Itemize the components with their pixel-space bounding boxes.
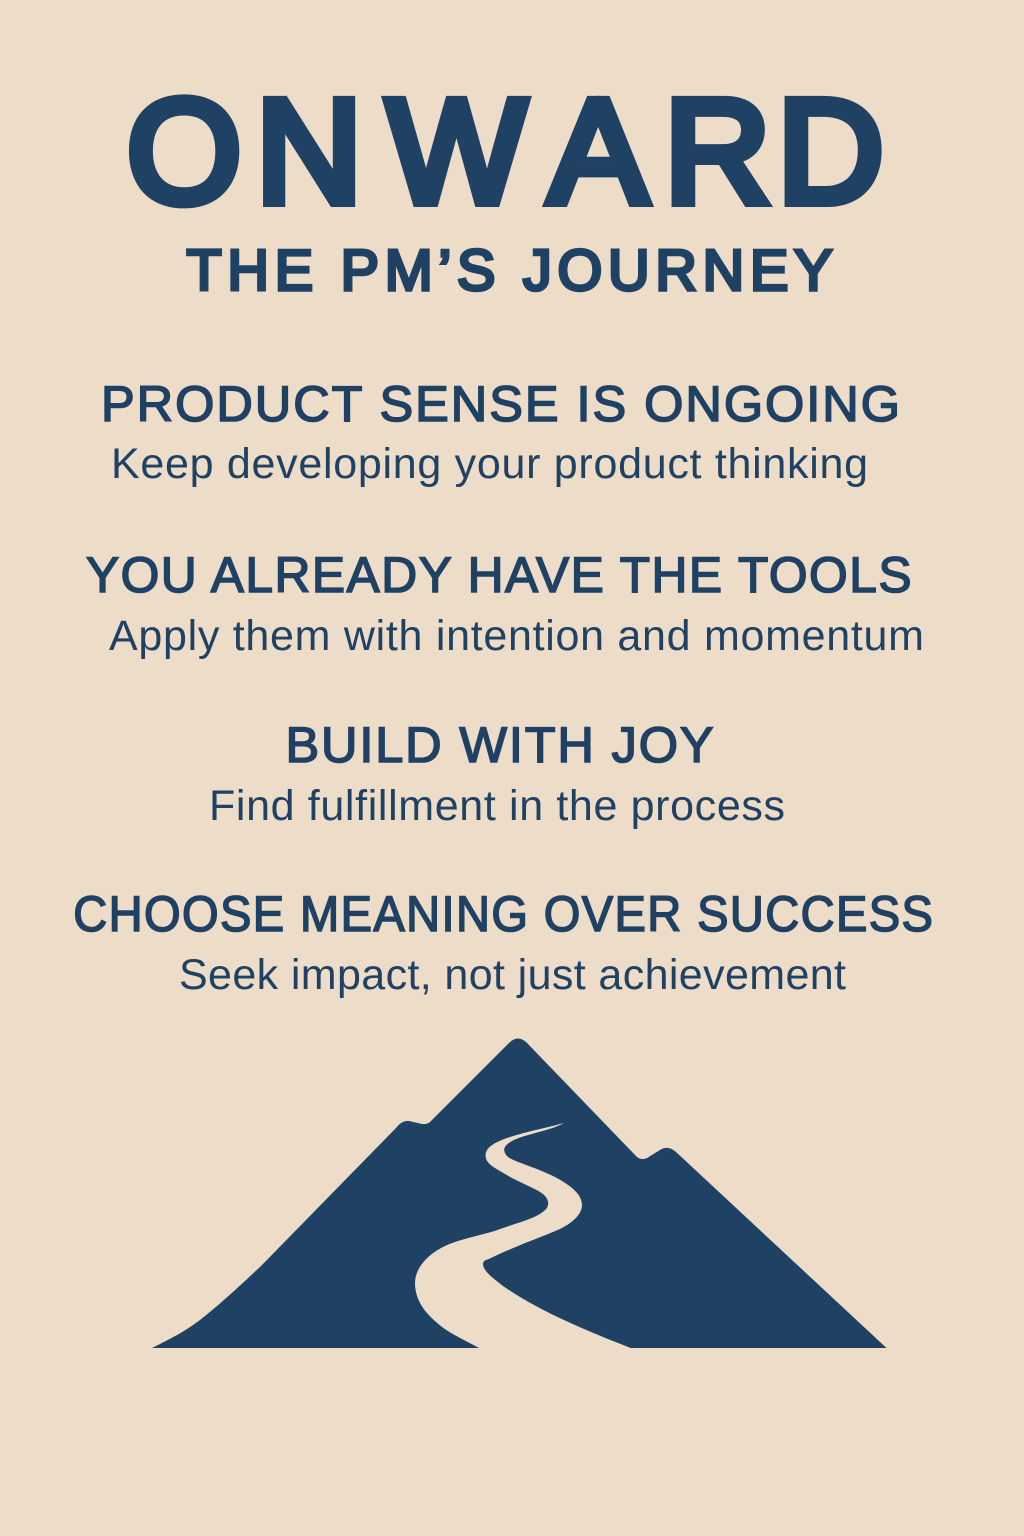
section: meaning: [73, 885, 934, 999]
heading: tools: YOU ALREADY HAVE THE TOOLS: [86, 546, 913, 603]
section: tools: [86, 546, 924, 660]
icon: mountain with winding path: [152, 1038, 886, 1348]
subtitle: THE PM’S JOURNEY: [186, 239, 832, 303]
text: product sense detail: Keep developing your product thinking: [111, 440, 868, 488]
text: joy detail: Find fulfillment in the process: [209, 782, 785, 830]
section: product sense: [101, 375, 900, 488]
heading: product sense: PRODUCT SENSE IS ONGOING: [101, 375, 900, 432]
text: tools detail: Apply them with intention and momentum: [109, 612, 924, 660]
section: joy: [209, 716, 785, 830]
text: meaning detail: Seek impact, not just achievement: [179, 951, 846, 999]
title: ONWARD: [127, 70, 884, 234]
heading: joy: BUILD WITH JOY: [286, 716, 714, 773]
heading: meaning: CHOOSE MEANING OVER SUCCESS: [73, 885, 934, 942]
